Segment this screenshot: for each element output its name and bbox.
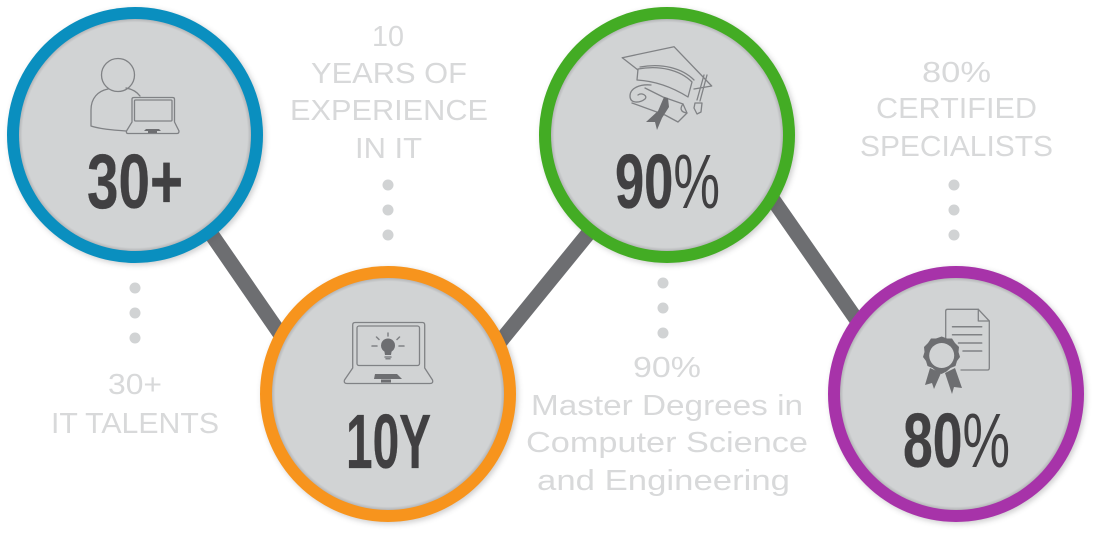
text: 80% certified specialists: SPECIALISTS [860,131,1053,163]
text: 10 years of experience in IT: EXPERIENCE [290,95,488,127]
circle: 90% master degrees [539,7,797,265]
text: 10 years of experience in IT: IN IT [355,133,422,165]
text: 10 years of experience in IT: 10 [372,21,404,53]
number: 30+: 30+ [87,139,183,225]
text: 80% certified specialists: CERTIFIED [876,93,1037,125]
text: 80% certified specialists: 80% [922,57,991,89]
text: 90% master degrees: and Engineering [537,465,790,497]
dots: under 30+ [130,282,140,344]
text: 90% master degrees: 90% [633,352,701,384]
circle: 30+ IT talents [7,7,265,265]
connector line: 90% to 80% [767,191,863,329]
circle: 80% certified [828,266,1086,524]
dots: above 10Y [382,180,394,240]
text: 30+ IT talents [51,369,219,440]
text: 90% master degrees: Computer Science [526,427,808,459]
icon: certificate with ribbon seal [923,309,989,394]
text: 10 years of experience in IT [290,21,488,165]
text: 30+ IT talents: 30+ [108,369,162,401]
number: 90%: 90% [615,139,720,225]
connector line: 30+ to 10Y [205,225,285,341]
dots: under 90% [658,278,668,338]
text: 30+ IT talents: IT TALENTS [51,408,219,440]
text: 90% master degrees: Master Degrees in [531,390,803,422]
icon: person with laptop [91,58,179,134]
dots: above 80% [948,180,960,240]
text: 80% certified specialists [860,57,1053,163]
number: 10Y: 10Y [346,399,431,485]
circle: 10Y experience [260,266,518,524]
text: 90% master degrees [526,352,808,497]
icon: laptop with light bulb [344,322,433,384]
number: 80%: 80% [903,398,1010,484]
text: 10 years of experience in IT: YEARS OF [311,58,467,90]
icon: graduation cap and diploma [622,47,712,130]
connector line: 10Y to 90% [495,224,596,348]
